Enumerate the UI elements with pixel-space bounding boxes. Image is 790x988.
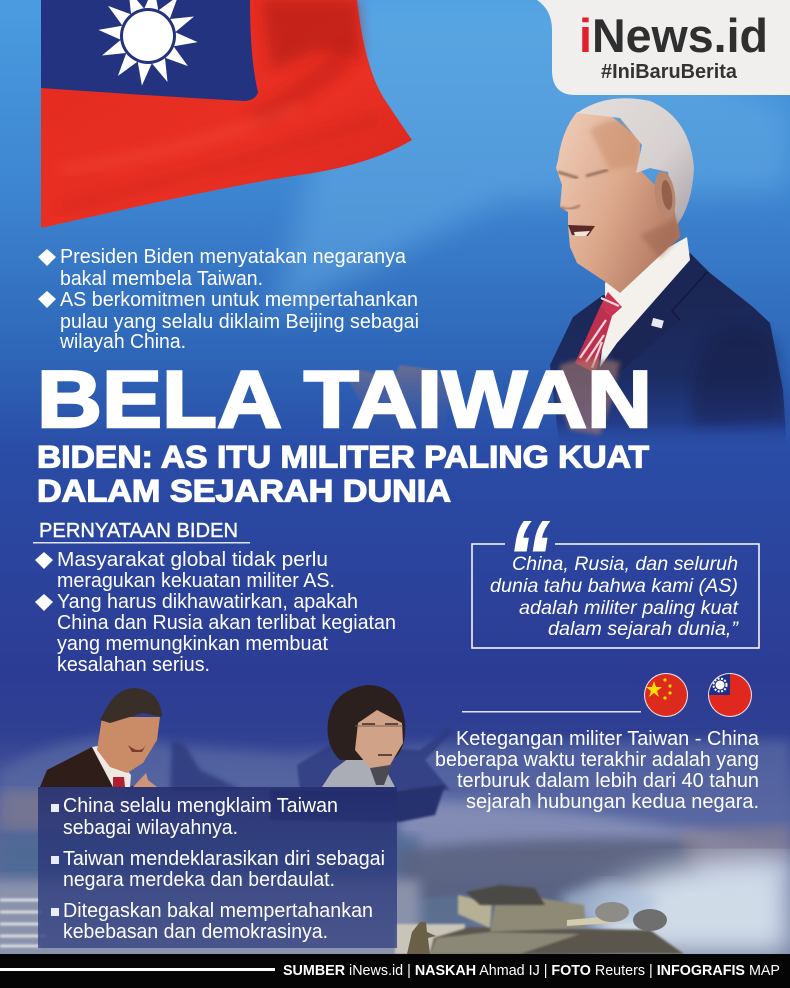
subtitle (37, 438, 649, 508)
tension paragraph: Ketegangan militer Taiwan - China (456, 728, 760, 750)
head (556, 112, 680, 293)
statement heading: PERNYATAAN BIDEN (39, 520, 238, 542)
flag sun (92, 0, 204, 92)
hand under title left (345, 365, 450, 450)
flag canton (41, 0, 258, 101)
tension paragraph: sejarah hubungan kedua negara. (466, 791, 759, 813)
intro bullets: AS berkomitmen untuk mempertahankan (60, 289, 418, 311)
subtitle: BIDEN: AS ITU MILITER PALING KUAT (37, 438, 649, 474)
portrait: Xi Jinping (40, 688, 162, 787)
Biden photo (345, 98, 787, 452)
tension paragraph (435, 728, 760, 813)
panel: China Taiwan facts: Ditegaskan bakal mempertahankan (63, 900, 373, 922)
hand under title right (558, 359, 620, 435)
tank (407, 885, 684, 954)
panel: China Taiwan facts: kebebasan dan demokrasinya. (63, 921, 328, 943)
soldier (407, 922, 436, 954)
logo text: iNews.id (579, 9, 768, 62)
callout: quote: China, Rusia, dan seluruh (512, 553, 738, 575)
footer (0, 954, 790, 988)
tension paragraph: terburuk dalam lebih dari 40 tahun (457, 770, 759, 792)
panel: statement of Biden: China dan Rusia akan terlibat kegiatan (57, 612, 396, 634)
intro bullets: bakal membela Taiwan. (60, 268, 263, 290)
footer: SUMBER iNews.id | NASKAH Ahmad IJ | FOTO Reuters | INFOGRAFIS MAP (283, 962, 780, 979)
battle photo background (0, 727, 790, 964)
callout: quote: adalah militer paling kuat (519, 597, 740, 619)
panel: China Taiwan facts: Taiwan mendeklarasikan diri sebagai (63, 848, 385, 870)
subtitle: DALAM SEJARAH DUNIA (37, 472, 451, 508)
panel: statement of Biden: Masyarakat global tidak perlu (57, 549, 328, 571)
portrait: Tsai Ing-wen (322, 685, 405, 787)
title: BELA TAIWAN (37, 355, 652, 445)
panel: statement of Biden (33, 520, 396, 676)
hashtag: #IniBaruBerita (601, 61, 738, 83)
callout: quote (472, 498, 759, 648)
Taiwan flag (41, 0, 412, 228)
quote mark: “ (506, 498, 551, 618)
intro bullets (38, 246, 419, 353)
panel: statement of Biden: meragukan kekuatan militer AS. (57, 570, 335, 592)
panel: China Taiwan facts: sebagai wilayahnya. (63, 817, 238, 839)
callout: quote: dunia tahu bahwa kami (AS) (490, 575, 738, 597)
icon: flags (462, 673, 752, 717)
panel: China Taiwan facts (38, 787, 397, 948)
tension paragraph: beberapa waktu terakhir adalah yang (435, 749, 759, 771)
logo panel (537, 0, 790, 95)
panel: China Taiwan facts: negara merdeka dan berdaulat. (63, 869, 335, 891)
panel: statement of Biden: yang memungkinkan membuat (57, 633, 328, 655)
panel: statement of Biden: kesalahan serius. (57, 654, 210, 676)
intro bullets: pulau yang selalu diklaim Beijing sebagai (60, 311, 419, 333)
panel: China Taiwan facts: China selalu mengklaim Taiwan (63, 795, 338, 817)
intro bullets: Presiden Biden menyatakan negaranya (60, 246, 407, 268)
callout: quote: dalam sejarah dunia,” (548, 618, 740, 640)
panel: statement of Biden: Yang harus dikhawatirkan, apakah (57, 591, 358, 613)
intro bullets: wilayah China. (59, 331, 186, 353)
